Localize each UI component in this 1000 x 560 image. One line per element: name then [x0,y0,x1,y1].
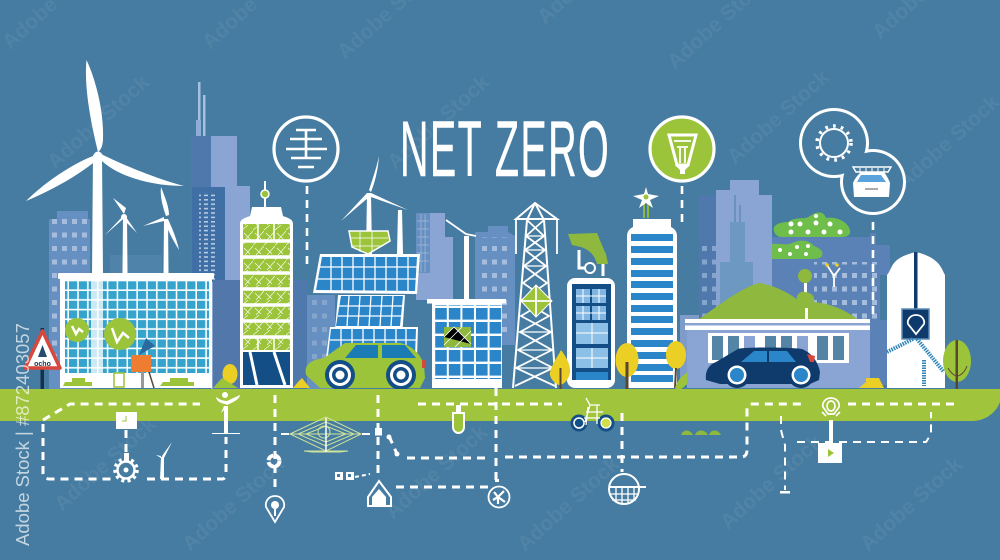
play square icon [818,443,842,463]
small squares [335,472,354,480]
gear [820,129,848,157]
yellow pile [859,378,884,388]
green badges [65,318,136,350]
pylon green icon [521,285,552,317]
small bushes [681,430,721,435]
dark blue car [706,348,820,388]
orange sign [131,338,155,388]
green stacks [63,378,194,386]
green ground strip [0,389,1000,421]
green clouds with dots [772,212,850,259]
stock id text: Adobe Stock | #872403057 [12,323,33,546]
map pin on road [822,398,840,416]
yellow trees [550,341,693,393]
blue windows building with turbine [427,220,506,388]
striped tower with flower [627,187,677,388]
yellow pile left [293,378,310,388]
right tree [943,340,971,399]
dashed connector 2 [681,186,683,224]
road icon square [116,412,137,429]
office building with cyan windows [58,273,214,388]
yellow leaf plant [213,364,238,388]
green glass tower [240,181,293,388]
wheel circle icon [488,479,510,508]
turbines on top [341,156,408,254]
dashed connector 1 [306,186,308,265]
green roof building with dark car [685,263,870,388]
white silo with pin sign [887,252,945,388]
main wind turbine [26,60,184,388]
solar car [853,167,891,197]
watermarks: Adobe Stock [50,413,161,516]
title: NET ZERO [400,105,610,194]
house icon [368,481,391,506]
watermarks: Adobe Stock [43,71,154,174]
small turbine icon [156,442,172,479]
road turbine icon [212,392,240,434]
skyline: centre background towers [416,213,702,385]
dots [386,434,400,456]
watermarks: Adobe Stock [513,453,624,556]
t-foot [780,491,790,494]
skyline: right background towers [699,180,890,385]
net diamond icon [281,417,370,452]
icon: signal lines circle [274,117,338,181]
watermarks: Adobe Stock [723,66,834,169]
bicycle icon [570,398,614,432]
green electric car [306,343,425,390]
small wind turbines [105,187,179,273]
transmission pylon [513,203,557,388]
ball basket icon [609,474,646,504]
icon bubble: gear and solar car [799,108,906,215]
warning sign: ocho [34,361,51,368]
square node [375,428,382,436]
panels [332,295,405,365]
skyline: left background tower [49,211,162,390]
factory with green smoke [567,233,615,388]
bottle icon [453,405,464,433]
dashed connector 3 [872,222,874,320]
watermarks: Adobe Stock [178,453,289,556]
dashed network left loop [43,388,956,490]
pin icon [266,496,284,522]
icon: green lamp circle [650,117,714,181]
green diamond [349,231,390,254]
recycle icon [268,456,280,466]
skyline: tall blue tower with spires [191,82,335,390]
watermarks: Adobe Stock [381,421,492,524]
watermarks: Adobe Stock [856,453,967,556]
solar panel tower with turbines [313,156,420,365]
watermarks: Adobe Stock [716,431,827,534]
gear icon [115,453,137,481]
watermarks: Adobe Stock [383,71,494,174]
warning sign [25,328,60,406]
